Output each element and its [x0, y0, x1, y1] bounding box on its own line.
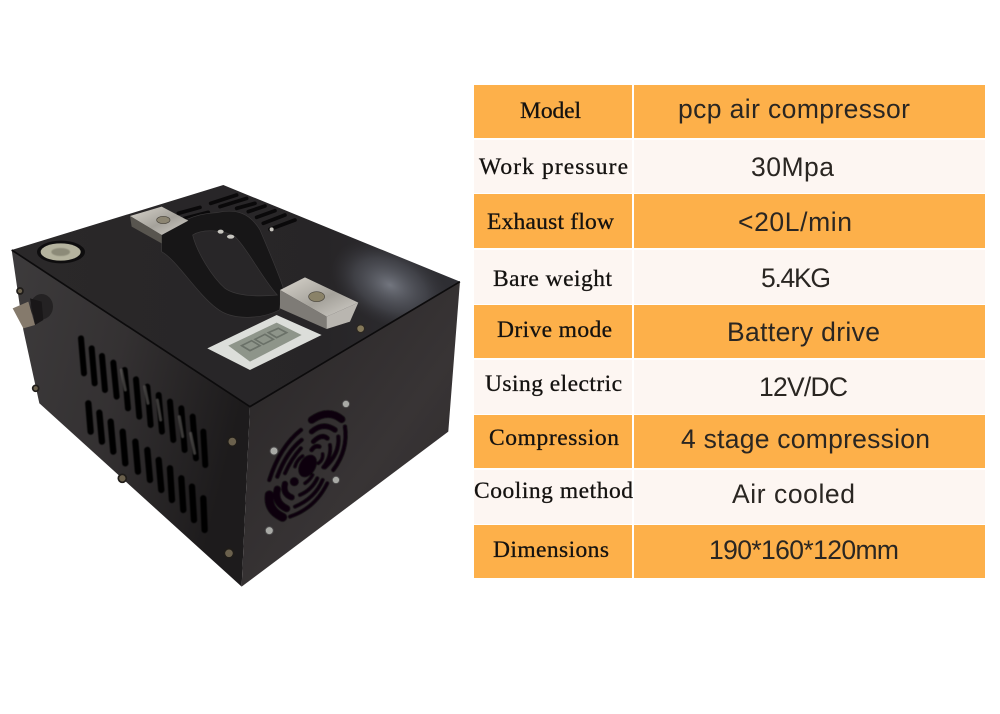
carry handle [162, 211, 283, 317]
upper vent slits [81, 338, 205, 465]
speckled highlight [341, 248, 437, 320]
row: bare weight [493, 263, 831, 293]
row: drive mode: Drive mode [497, 317, 612, 343]
fan blade glints behind the vents [121, 370, 195, 453]
row: drive mode [497, 317, 880, 347]
row: bare weight: 5.4KG [761, 263, 831, 293]
row: bare weight: Bare weight [493, 266, 612, 292]
lower vent slits [88, 403, 205, 530]
handle, brackets, display and vents [130, 195, 358, 370]
row: dimensions: 190*160*120mm [709, 535, 899, 565]
row: cooling method: Cooling method [474, 478, 633, 504]
row: exhaust flow [487, 207, 852, 237]
row: drive mode: Battery drive [727, 317, 880, 347]
specification table [474, 85, 985, 578]
row: compression: 4 stage compression [681, 424, 930, 454]
row: work pressure: 30Mpa [751, 152, 834, 182]
row: cooling method [474, 478, 855, 509]
row: dimensions [493, 535, 899, 565]
photo: portable air compressor [12, 185, 464, 587]
row: exhaust flow: Exhaust flow [487, 209, 614, 235]
row: compression [489, 424, 930, 454]
row: model [520, 94, 910, 124]
fan mounting screws [265, 400, 350, 535]
row: using electric: 12V/DC [759, 372, 848, 402]
row: exhaust flow: <20L/min [738, 207, 852, 237]
top panel screw [357, 325, 365, 333]
row: cooling method: Air cooled [732, 479, 855, 509]
row: using electric [485, 371, 848, 402]
top panel [12, 185, 464, 407]
rear metal bracket [130, 207, 188, 243]
row: using electric: Using electric [485, 371, 622, 397]
row: model: pcp air compressor [678, 94, 910, 124]
row: work pressure [479, 152, 834, 182]
row: model: Model [520, 98, 581, 124]
front panel with fan grille [242, 282, 460, 587]
left side panel with vents [12, 250, 250, 587]
small highlights under handle [218, 227, 274, 239]
front metal bracket [280, 277, 358, 329]
row: work pressure: Work pressure [479, 154, 628, 180]
row: dimensions: Dimensions [493, 537, 609, 563]
row: compression: Compression [489, 425, 619, 451]
digital pressure display [207, 315, 322, 370]
side panel screws [17, 288, 237, 558]
edge lines [12, 250, 460, 407]
table row backgrounds [474, 85, 985, 578]
pressure gauge [37, 241, 85, 263]
fan grille [269, 414, 346, 517]
top vent slits [178, 195, 295, 229]
air outlet connector [13, 294, 53, 328]
